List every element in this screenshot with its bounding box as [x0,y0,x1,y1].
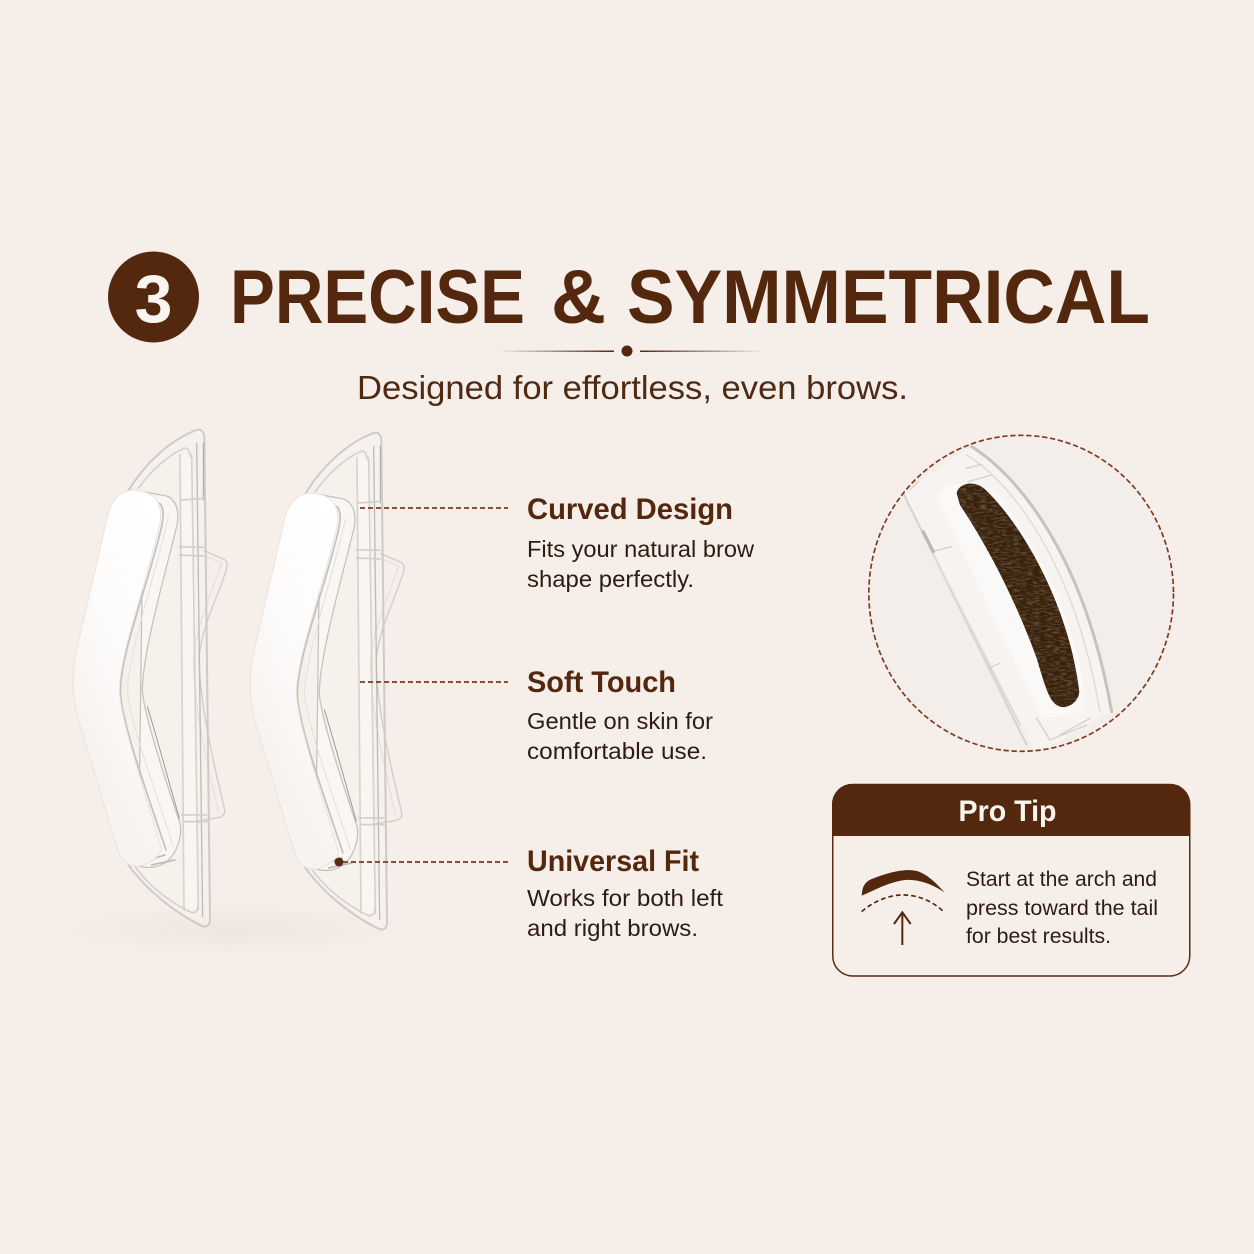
title: SYMMETRICAL [627,255,1150,340]
pro tip text: for best results. [966,924,1111,948]
step number badge: 3 [135,261,172,337]
feature: soft touch: Gentle on skin for [527,708,713,734]
subtitle: Designed for effortless, even brows. [357,369,908,406]
left brow stamp [73,430,227,927]
leader line: soft touch [360,681,508,683]
feature: curved design: Fits your natural brow [527,536,754,562]
feature: curved design: shape perfectly. [527,566,694,592]
feature: curved design [527,493,754,592]
title divider [498,346,765,356]
dashed ring [869,435,1173,751]
icon: brow with dashed arc and arrow [862,870,944,945]
leader line: curved design [360,507,508,509]
floor shadow [45,902,415,958]
feature: soft touch [527,666,713,764]
feature: soft touch: Soft Touch [527,666,676,699]
pro tip heading: Pro Tip [958,795,1056,828]
feature: universal fit [527,845,724,941]
product photo: two clear brow stamps [45,430,415,958]
right brow stamp [250,433,404,930]
pro tip text: Start at the arch and [966,867,1157,891]
detail circle: stamp with brow powder [869,435,1173,753]
pro tip box [833,784,1190,976]
title: PRECISE [230,255,525,340]
pro tip text [966,867,1158,948]
step number badge [108,252,199,342]
pro tip text: press toward the tail [966,896,1158,920]
title: & [551,255,606,340]
brow powder [957,484,1079,707]
pro tip header [832,784,1190,836]
feature: universal fit: Universal Fit [527,845,699,878]
leader line: universal fit [334,858,508,866]
feature: soft touch: comfortable use. [527,738,707,764]
feature: curved design: Curved Design [527,493,733,526]
panel: pro tip [832,784,1190,976]
feature: universal fit: Works for both left [527,885,724,911]
feature: universal fit: and right brows. [527,915,698,941]
